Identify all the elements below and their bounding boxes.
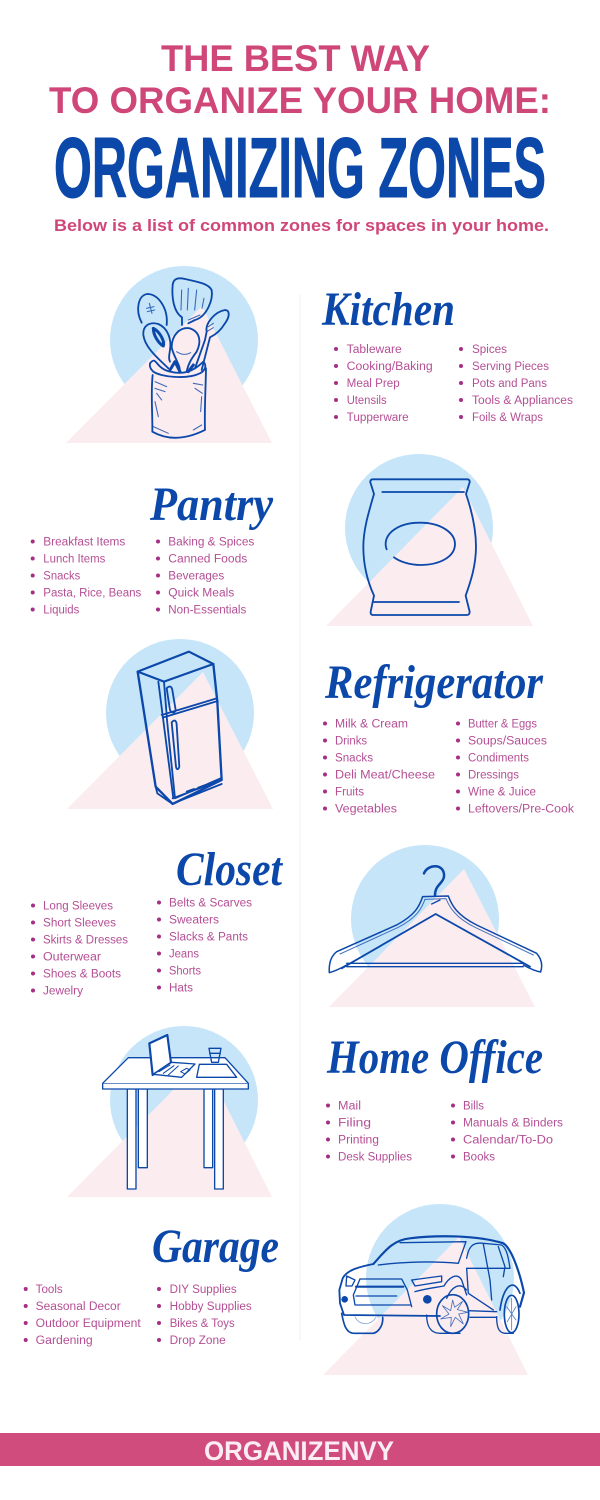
list: closet zones: Shoes & Boots bbox=[43, 968, 121, 980]
panel: kitchen illustration bbox=[66, 266, 272, 443]
list: garage zones: DIY Supplies bbox=[170, 1284, 237, 1296]
icon: car bbox=[339, 1236, 524, 1333]
list: garage zones: Bikes & Toys bbox=[170, 1318, 235, 1330]
panel: refrigerator illustration bbox=[67, 639, 273, 809]
list: refrigerator zones: Deli Meat/Cheese bbox=[335, 770, 435, 782]
list: kitchen zones: Utensils bbox=[347, 395, 387, 407]
icon: food bag bbox=[363, 479, 476, 615]
heading: kitchen: Kitchen bbox=[321, 283, 455, 336]
title: the best way to organize your home: TO ORGANIZE YOUR HOME: bbox=[49, 80, 551, 121]
heading: home office: Home Office bbox=[326, 1031, 543, 1084]
icon: desk with laptop bbox=[103, 1035, 248, 1189]
list: closet zones: Slacks & Pants bbox=[169, 932, 248, 944]
list: home office zones: Calendar/To-Do bbox=[463, 1134, 553, 1146]
list: refrigerator zones: Fruits bbox=[335, 786, 364, 798]
list: closet zones: Shorts bbox=[169, 966, 201, 978]
list: refrigerator zones: Dressings bbox=[468, 770, 519, 782]
list: kitchen zones: Pots and Pans bbox=[472, 378, 547, 390]
list: closet zones bbox=[31, 898, 252, 998]
subtitle: Below is a list of common zones for spaces in your home. bbox=[54, 216, 549, 235]
icon: utensil jar bbox=[138, 278, 229, 438]
list: home office zones: Filing bbox=[338, 1118, 371, 1130]
list: garage zones: Outdoor Equipment bbox=[36, 1318, 142, 1330]
panel: closet illustration bbox=[329, 845, 542, 1007]
list: refrigerator zones: Leftovers/Pre-Cook bbox=[468, 804, 574, 816]
list: closet zones: Jeans bbox=[169, 948, 199, 960]
list: closet zones: Long Sleeves bbox=[43, 900, 113, 912]
list: closet zones: Belts & Scarves bbox=[169, 898, 252, 910]
list: home office zones: Manuals & Binders bbox=[463, 1118, 563, 1130]
list: closet zones: Outerwear bbox=[43, 952, 101, 964]
list: refrigerator zones: Wine & Juice bbox=[468, 786, 536, 798]
list: pantry zones: Breakfast Items bbox=[43, 536, 126, 548]
icon: refrigerator bbox=[138, 652, 222, 804]
list: refrigerator zones: Butter & Eggs bbox=[468, 718, 537, 730]
list: pantry zones: Snacks bbox=[43, 570, 81, 582]
list: refrigerator zones: Condiments bbox=[468, 752, 529, 764]
list: closet zones: Sweaters bbox=[169, 914, 219, 926]
list: pantry zones: Lunch Items bbox=[43, 554, 106, 566]
list: kitchen zones: Tupperware bbox=[347, 412, 409, 424]
heading: refrigerator: Refrigerator bbox=[324, 656, 544, 709]
footer banner bbox=[0, 1433, 600, 1466]
list: refrigerator zones: Milk & Cream bbox=[335, 718, 408, 730]
list: kitchen zones: Spices bbox=[472, 344, 507, 356]
list: kitchen zones: Serving Pieces bbox=[472, 361, 549, 373]
list: home office zones bbox=[326, 1100, 563, 1164]
list: pantry zones bbox=[31, 536, 255, 616]
list: pantry zones: Baking & Spices bbox=[168, 536, 255, 548]
heading: garage: Garage bbox=[152, 1220, 279, 1273]
panel: garage illustration bbox=[323, 1204, 528, 1375]
list: home office zones: Desk Supplies bbox=[338, 1152, 412, 1164]
list: garage zones: Tools bbox=[36, 1284, 63, 1296]
title: the best way to organize your home: THE BEST WAY bbox=[161, 38, 430, 79]
heading: closet: Closet bbox=[176, 843, 283, 896]
list: pantry zones: Pasta, Rice, Beans bbox=[43, 588, 142, 600]
list: garage zones: Gardening bbox=[36, 1335, 93, 1347]
list: home office zones: Bills bbox=[463, 1100, 484, 1112]
list: refrigerator zones: Drinks bbox=[335, 736, 367, 748]
heading: pantry: Pantry bbox=[149, 478, 274, 531]
list: home office zones: Mail bbox=[338, 1100, 361, 1112]
list: refrigerator zones: Soups/Sauces bbox=[468, 736, 547, 748]
list: kitchen zones bbox=[334, 344, 573, 424]
list: kitchen zones: Tableware bbox=[347, 344, 402, 356]
title: the best way to organize your home bbox=[49, 38, 551, 121]
list: kitchen zones: Meal Prep bbox=[347, 378, 400, 390]
list: garage zones: Seasonal Decor bbox=[36, 1301, 121, 1313]
list: home office zones: Books bbox=[463, 1152, 495, 1164]
list: pantry zones: Quick Meals bbox=[168, 588, 235, 600]
footer banner: ORGANIZENVY bbox=[204, 1436, 394, 1466]
panel: pantry illustration bbox=[326, 454, 533, 626]
list: pantry zones: Beverages bbox=[168, 570, 225, 582]
list: garage zones: Drop Zone bbox=[170, 1335, 226, 1347]
list: refrigerator zones: Vegetables bbox=[335, 804, 397, 816]
list: garage zones: Hobby Supplies bbox=[170, 1301, 252, 1313]
list: home office zones: Printing bbox=[338, 1134, 379, 1146]
list: pantry zones: Canned Foods bbox=[168, 554, 248, 566]
list: refrigerator zones bbox=[323, 718, 574, 816]
list: kitchen zones: Cooking/Baking bbox=[347, 361, 433, 373]
icon: coat hanger bbox=[329, 866, 542, 973]
list: closet zones: Short Sleeves bbox=[43, 918, 116, 930]
list: pantry zones: Non-Essentials bbox=[168, 604, 247, 616]
list: kitchen zones: Tools & Appliances bbox=[472, 395, 573, 407]
list: refrigerator zones: Snacks bbox=[335, 752, 373, 764]
list: kitchen zones: Foils & Wraps bbox=[472, 412, 543, 424]
list: garage zones bbox=[24, 1284, 252, 1347]
panel: home office illustration bbox=[67, 1026, 272, 1197]
list: closet zones: Hats bbox=[169, 982, 193, 994]
list: closet zones: Skirts & Dresses bbox=[43, 934, 128, 946]
list: closet zones: Jewelry bbox=[43, 986, 83, 998]
list: pantry zones: Liquids bbox=[43, 604, 80, 616]
